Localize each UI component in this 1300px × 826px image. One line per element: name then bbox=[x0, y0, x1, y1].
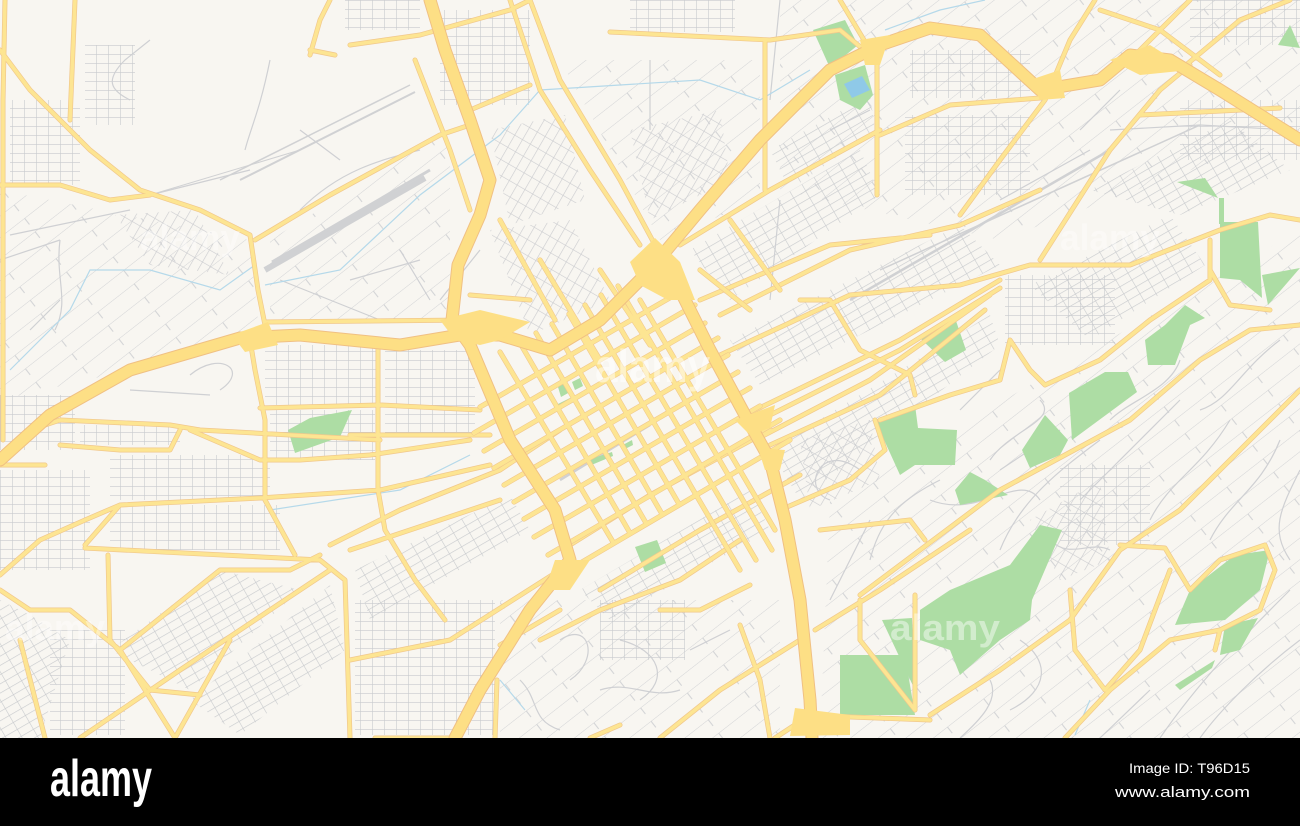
rail yards bbox=[150, 85, 1200, 480]
alamy watermarks: alamy bbox=[595, 340, 710, 392]
alamy watermarks: alamy bbox=[5, 607, 105, 648]
alamy watermarks: alamy bbox=[890, 607, 1000, 648]
water courses bbox=[10, 0, 1090, 735]
alamy watermarks bbox=[5, 217, 1160, 648]
alamy watermarks: alamy bbox=[140, 217, 240, 258]
freeway interchanges bbox=[232, 35, 1190, 736]
lake bbox=[844, 76, 870, 98]
alamy watermarks: alamy bbox=[1060, 217, 1160, 258]
parks bbox=[288, 20, 1300, 715]
image id: Image ID: T96D15 bbox=[1129, 760, 1250, 776]
downtown street grid bbox=[474, 220, 790, 575]
alamy logo: alamy bbox=[50, 750, 152, 808]
website: www.alamy.com bbox=[1114, 784, 1250, 801]
footer bar bbox=[0, 738, 1300, 826]
